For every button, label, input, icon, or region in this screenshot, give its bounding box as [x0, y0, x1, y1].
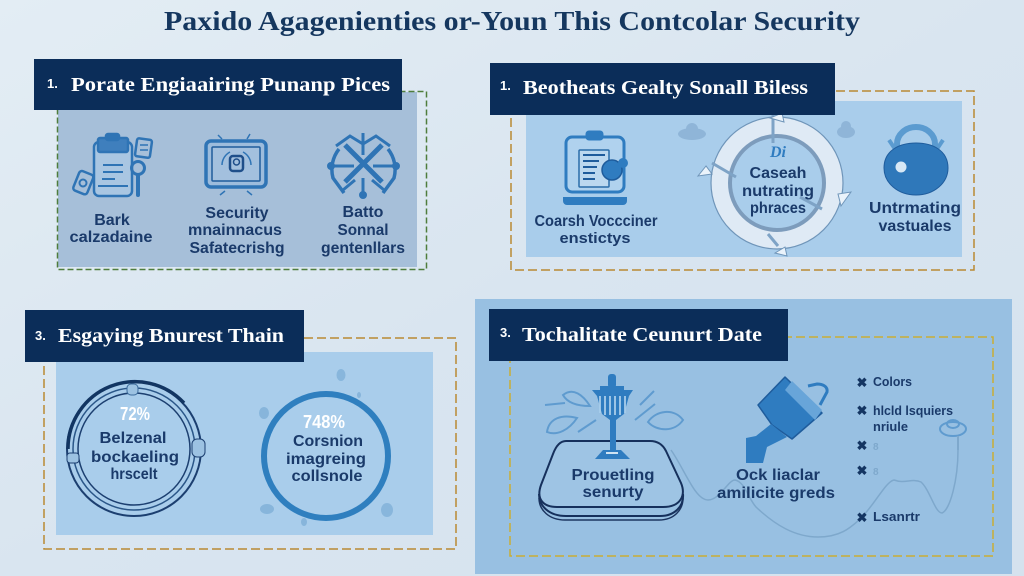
decorative clouds — [678, 121, 855, 140]
label: coarsh voccciner: Coarsh Voccciner — [534, 213, 658, 230]
label: bark — [70, 212, 153, 246]
label: ock liaclar — [717, 467, 835, 502]
checklist — [857, 374, 953, 525]
checklist: ✖ — [857, 463, 868, 478]
panel: bottom left — [25, 310, 456, 549]
label: untrmating: Untrmating — [869, 200, 961, 217]
label: batto: Sonnal — [338, 222, 388, 239]
ring 1 label: Belzenal — [100, 430, 166, 447]
ring 2 label — [286, 433, 366, 485]
ring label: Caseah — [750, 165, 806, 182]
heading: top right — [490, 63, 835, 115]
heading: bottom right: 3. — [500, 325, 511, 340]
ring gauge: 72%: 72% — [120, 404, 150, 424]
heading: bottom right — [489, 309, 788, 361]
ring 2 label: imagreing — [286, 451, 366, 468]
ring 1 label: hrscelt — [110, 466, 158, 483]
platform with label: Prouetling — [572, 467, 654, 484]
label: untrmating — [869, 200, 961, 235]
label: batto: gentenllars — [321, 240, 405, 257]
heading: top left — [34, 59, 402, 110]
ring 1 label: bockaeling — [91, 449, 179, 466]
heading: top left: Porate Engiaairing Punanp Pices — [71, 74, 390, 96]
decorative drops — [259, 369, 393, 526]
panel: bottom right — [475, 299, 1012, 574]
label: untrmating: vastuales — [878, 218, 952, 235]
heading: top right: 1. — [500, 78, 511, 93]
label: security: Security — [205, 205, 269, 222]
checklist: Colors — [873, 374, 912, 389]
ring gauge: 748% — [264, 394, 388, 518]
ring gauge: 72% — [67, 382, 205, 516]
icon: secure tablet — [206, 134, 266, 195]
label: ock liaclar: amilicite greds — [717, 485, 835, 502]
icon: trophy with splash — [545, 374, 683, 459]
label: ock liaclar: Ock liaclar — [736, 467, 820, 484]
label: batto — [321, 204, 405, 257]
ring label: phraces — [750, 200, 806, 217]
heading: bottom left: Esgaying Bnurest Thain — [58, 325, 284, 347]
checklist: 8 — [873, 467, 879, 478]
title: Paxido Agagenienties or-Youn This Contcolar Security — [164, 6, 861, 36]
checklist: ✖ — [857, 375, 868, 390]
checklist: hlcld lsquiers — [873, 403, 953, 418]
ring label: nutrating — [742, 183, 814, 200]
panel: top left — [34, 59, 426, 270]
checklist: ✖ — [857, 510, 868, 525]
checklist: nriule — [873, 419, 908, 434]
icon: padlock — [884, 127, 948, 195]
panel: top right — [490, 63, 974, 270]
label: security: Safatecrishg — [190, 240, 284, 257]
label: coarsh voccciner: enstictys — [560, 230, 630, 247]
checklist: Lsanrtr — [873, 509, 920, 524]
label: coarsh voccciner — [534, 213, 658, 247]
label: security — [188, 205, 284, 257]
heading: bottom right: Tochalitate Ceunurt Date — [522, 324, 762, 346]
icon: clipboard and magnifier — [72, 134, 152, 196]
heading: top left: 1. — [47, 76, 58, 91]
ring label: Di — [769, 144, 787, 161]
connector wire — [671, 450, 958, 537]
icon: small cloud — [940, 420, 966, 450]
icon: laptop with document — [563, 132, 628, 205]
platform with label: senurty — [582, 484, 644, 501]
heading: bottom left — [25, 310, 304, 362]
checklist: ✖ — [857, 403, 868, 418]
icon: tilted bottle — [746, 377, 827, 463]
platform with label — [539, 441, 683, 520]
checklist: ✖ — [857, 438, 868, 453]
label: bark: calzadaine — [70, 229, 153, 246]
icon: crossed network — [328, 133, 398, 198]
ring gauge: 748%: 748% — [303, 412, 345, 432]
label: bark: Bark — [94, 212, 130, 229]
heading: top right: Beotheats Gealty Sonall Biless — [523, 77, 808, 99]
heading: bottom left: 3. — [35, 328, 46, 343]
ring label — [742, 144, 814, 217]
ring 1 label — [91, 430, 179, 483]
ring 2 label: collsnole — [292, 468, 363, 485]
checklist: 8 — [873, 442, 879, 453]
cycle ring with arrows — [698, 113, 851, 256]
label: batto: Batto — [343, 204, 384, 221]
label: security: mnainnacus — [188, 222, 282, 239]
ring 2 label: Corsnion — [293, 433, 363, 450]
